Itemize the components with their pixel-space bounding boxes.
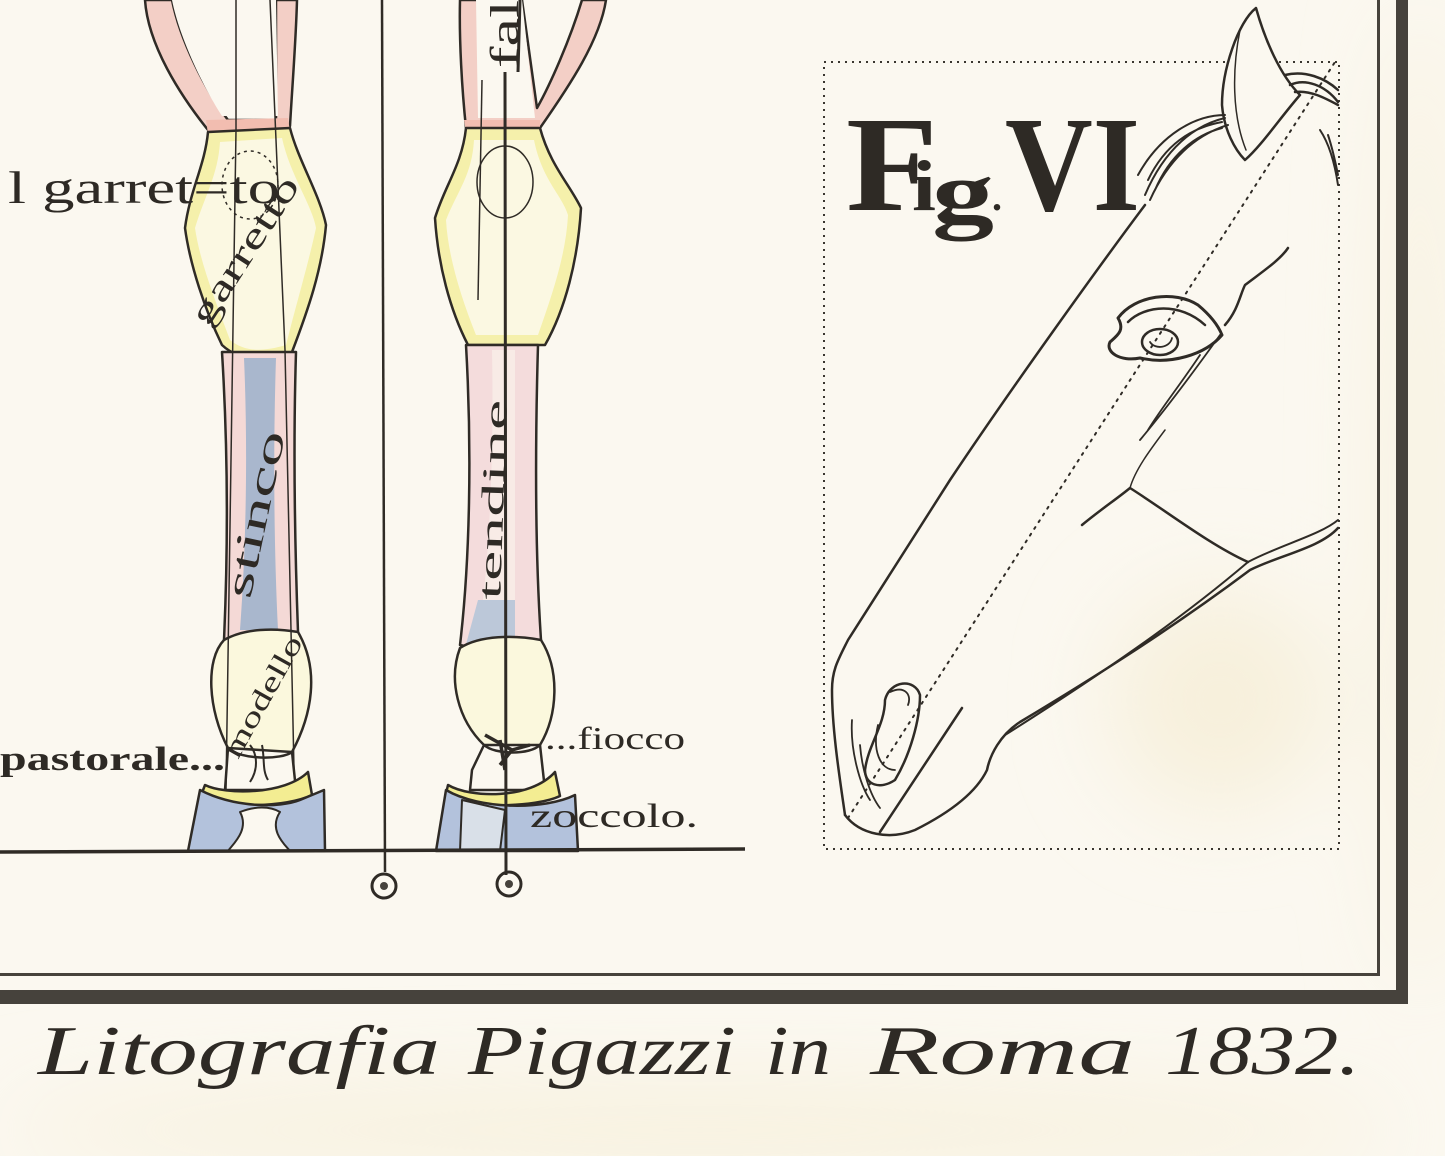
hoof [436,790,578,851]
left hind leg, rear view [145,0,326,851]
horse head drawing [832,8,1338,835]
hoof band [445,772,560,805]
cannon bone [222,352,298,643]
caption: lithographer credit [37,1013,1360,1090]
label: tendine: tendine [471,399,514,600]
centre guide lines [226,0,294,790]
label: garret-to: l garret=to [8,162,280,213]
hock circle [477,146,533,218]
heading: Fig. VI: . [992,174,1002,219]
caption: lithographer credit: Pigazzi [467,1013,736,1090]
caption: lithographer credit: 1832. [1165,1013,1360,1090]
fetlock [455,637,554,745]
central plumb line [505,0,520,875]
ground line [0,849,745,852]
heading: Fig. VI: VI [1005,90,1140,240]
hoof band [200,772,312,805]
label: pastorale: pastorale... [0,741,225,778]
hock joint [435,128,581,345]
heading: Fig. VI: g [932,145,994,242]
second plumb line end circle [497,872,521,896]
hock joint [185,128,326,359]
caption: lithographer credit: in [765,1013,831,1090]
mane tuft [1138,115,1228,200]
heading: Fig. VI: F [846,90,938,240]
panel: Fig. VI dotted frame [824,62,1339,849]
right hind leg, side view [435,0,606,875]
leg upper tendons [460,0,606,128]
label: modello: modello [217,630,310,763]
label: garretto: garretto [181,168,307,332]
label: zoccolo: zoccolo. [530,798,698,835]
heading: Fig. VI: i [912,146,936,226]
ear [1222,8,1300,160]
label: fiocco: ...fiocco [545,720,685,756]
dotted axis [848,62,1335,818]
pastern [225,748,296,790]
fetlock [211,630,311,752]
hock circle [222,151,278,219]
label: stinco: stinco [218,427,294,602]
heading: Fig. VI [846,90,1140,242]
caption: lithographer credit: Roma [868,1013,1135,1090]
muzzle and mouth [845,528,1338,835]
jaw lines [1082,488,1248,562]
forehead and nose profile [832,205,1145,815]
vertical plumb line with circle [372,0,396,898]
label: fal: fal [482,0,527,68]
leg upper tendons [145,0,297,130]
pastern and tuft [470,745,545,790]
caption: lithographer credit: Litografia [37,1013,440,1090]
eye [1109,296,1222,360]
hoof [188,790,325,851]
nostril [865,684,920,785]
cannon bone [460,345,541,648]
